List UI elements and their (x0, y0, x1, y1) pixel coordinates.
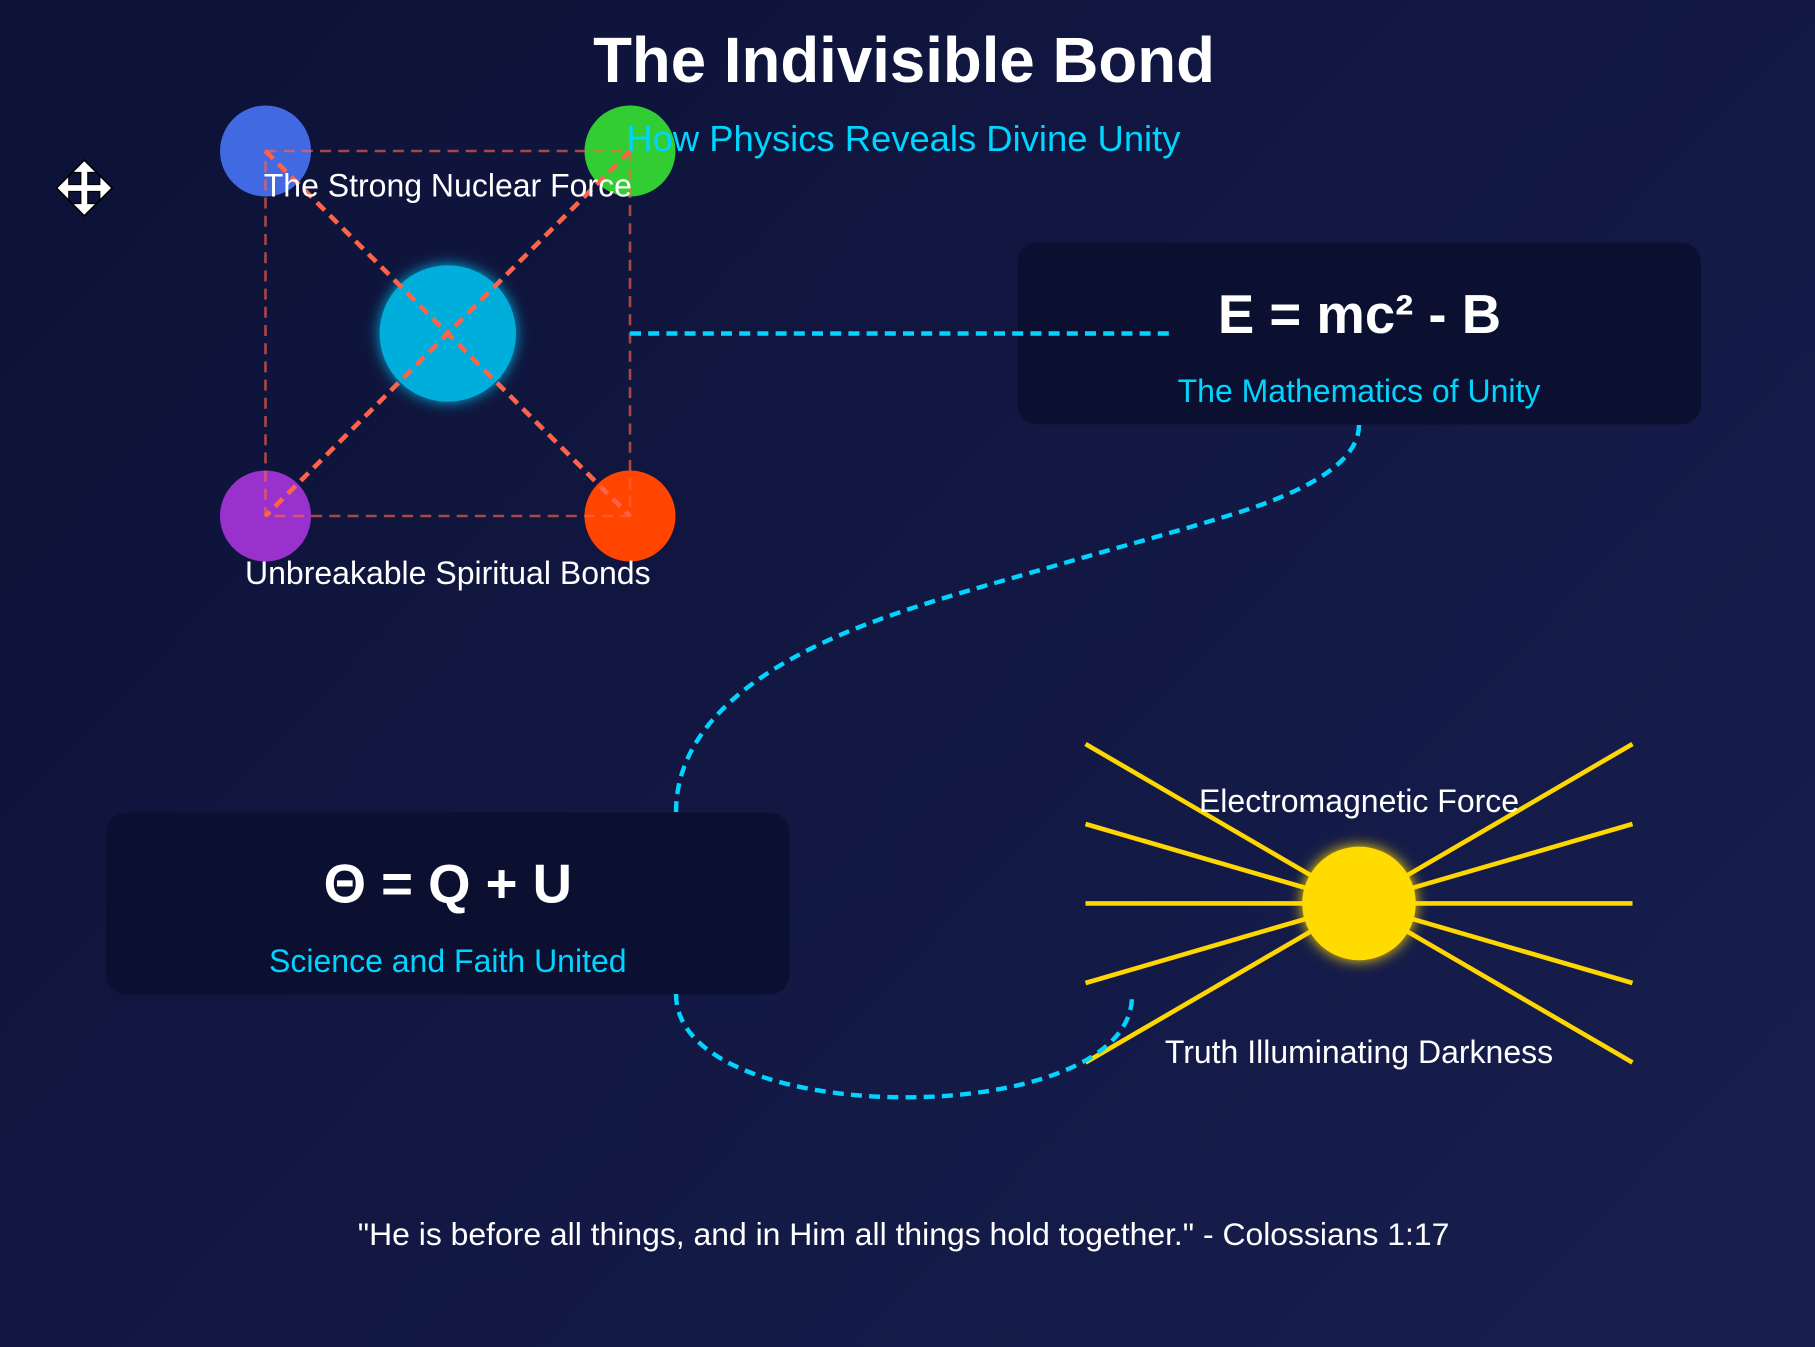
subtitle: How Physics Reveals Divine Unity (626, 118, 1181, 159)
formula: Θ = Q + U (324, 853, 572, 914)
label: unbreakable bonds: Unbreakable Spiritual Bonds (245, 555, 651, 591)
nucleon: blue (220, 106, 311, 196)
nucleon: orange-red (584, 470, 676, 562)
panel: strong nuclear force diagram (220, 106, 676, 591)
quote: "He is before all things, and in Him all things hold together." - Colossians 1:17 (358, 1216, 1449, 1252)
card background (106, 812, 790, 994)
label: strong nuclear force: The Strong Nuclear Force (264, 168, 632, 204)
sun disc (1302, 847, 1416, 960)
card background (1018, 242, 1701, 424)
panel: mass-energy formula (1018, 242, 1701, 424)
core: glowing centre (380, 265, 516, 402)
label: electromagnetic force: Electromagnetic Force (1199, 783, 1519, 819)
nucleon: purple (220, 470, 311, 562)
diagonal bonds (266, 151, 630, 516)
formula caption: Science and Faith United (269, 943, 627, 979)
formula: E = mc² - B (1218, 284, 1501, 345)
nucleon: green (584, 106, 676, 196)
panel: theta formula (106, 812, 790, 994)
title: The Indivisible Bond (593, 25, 1215, 96)
bond square (266, 151, 630, 516)
icon: move cursor (56, 160, 112, 216)
light rays (1086, 744, 1632, 1062)
connector: formula to theta card (676, 425, 1359, 812)
panel: electromagnetic sun (1086, 744, 1632, 1070)
formula caption: The Mathematics of Unity (1178, 373, 1540, 409)
label: truth: Truth Illuminating Darkness (1165, 1034, 1553, 1070)
connector: nuclear diagram to formula (630, 331, 1171, 336)
connector: theta card to sun (676, 994, 1132, 1097)
